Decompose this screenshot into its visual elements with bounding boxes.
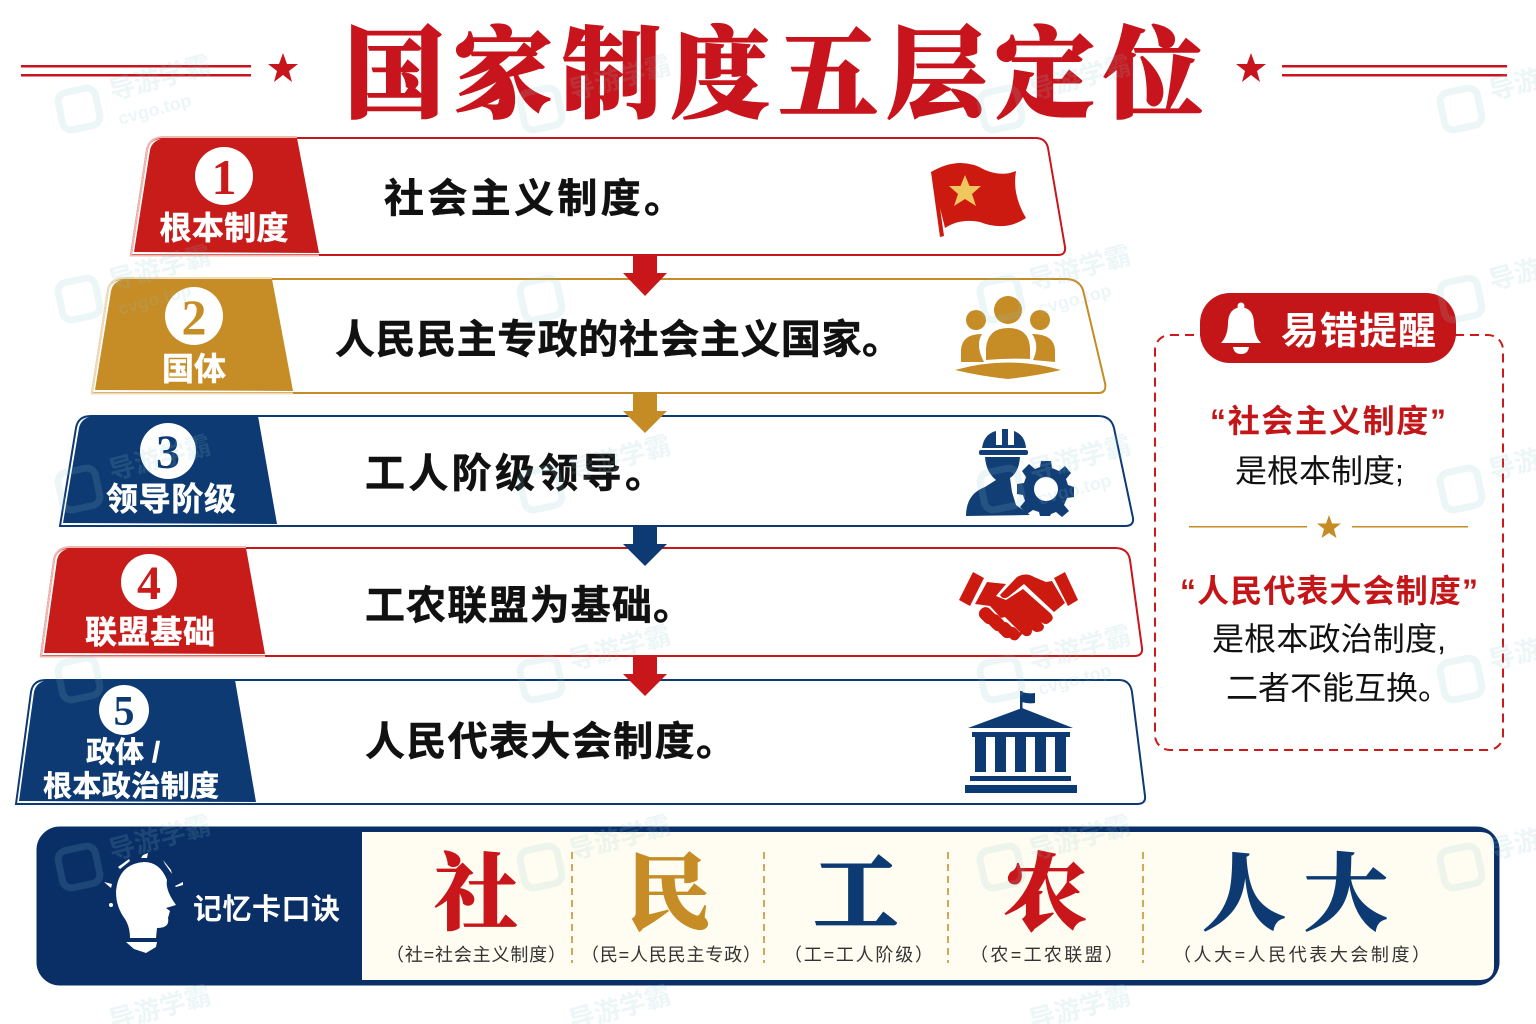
text: cvgo.top [1036, 280, 1113, 319]
title: 国家制度五层定位 [345, 0, 1203, 138]
mnemonic: 民: 民 [627, 827, 711, 948]
level 5 number [99, 685, 149, 735]
level 4 label: 联盟基础 [85, 614, 215, 650]
arrow: level 3 to 4 [623, 526, 667, 566]
level 3 number: 3 [156, 426, 180, 479]
level 2 number: 2 [182, 289, 206, 345]
level 5 number: 5 [114, 689, 134, 735]
mnemonic: 民 [581, 827, 761, 965]
arrow: level 1 to 2 [623, 255, 667, 296]
memory card heading: 记忆卡口诀 [193, 893, 340, 926]
level 1 number: 1 [212, 149, 236, 205]
text: 导游学霸 [1026, 240, 1134, 296]
icon: flag [931, 163, 1026, 237]
reminder text 2: 是根本政治制度, [1212, 621, 1446, 657]
reminder text 2: “人民代表大会制度” [1180, 573, 1478, 609]
panel: level 2 国体 [92, 278, 1105, 394]
text: 导游学霸 [566, 810, 674, 866]
mnemonic: 人大: 大 [1304, 827, 1388, 948]
level 3 label: 领导阶级 [106, 481, 236, 517]
arrow: level 4 to 5 [623, 656, 667, 696]
mnemonic: 社: （社=社会主义制度） [386, 945, 566, 965]
text: 导游学霸 [106, 430, 214, 486]
mnemonic: 人大: （人大=人民代表大会制度） [1173, 945, 1430, 965]
panel: level 1 根本制度 [131, 137, 1065, 256]
level 5 label: 根本政治制度 [43, 770, 219, 803]
mnemonic: 工: （工=工人阶级） [784, 945, 933, 965]
reminder divider with star [1189, 515, 1468, 538]
icon: people [955, 296, 1061, 379]
reminder text 2 [1180, 573, 1478, 706]
level 2 number [165, 287, 223, 345]
level 1 number [195, 147, 253, 205]
icon: bell [1221, 302, 1261, 354]
text: 导游学霸 [1026, 50, 1134, 106]
icon: worker with gear [966, 429, 1074, 517]
panel: level 4 联盟基础 [41, 547, 1142, 656]
level 5 label: 政体 / [86, 736, 160, 769]
mnemonic: 农: （农=工农联盟） [970, 945, 1123, 965]
text: 导游学霸 [1026, 810, 1134, 866]
icon: handshake [959, 572, 1078, 642]
mnemonic: 人大: 人 [1202, 827, 1286, 948]
level 5 label [43, 736, 219, 803]
level 5 statement: 人民代表大会制度。 [365, 720, 736, 764]
title decoration: left lines and star [21, 53, 298, 82]
mnemonic: 社: 社 [434, 827, 518, 948]
mnemonic: 社 [386, 827, 566, 965]
mnemonic: 农: 农 [1000, 827, 1087, 948]
panel: level 3 领导阶级 [60, 416, 1133, 526]
icon: light bulb head [104, 853, 183, 953]
title decoration: right lines and star [1236, 53, 1507, 82]
level 3 statement: 工人阶级领导。 [365, 452, 665, 496]
mnemonic: 工: 工 [814, 827, 898, 948]
icon: government building [965, 691, 1077, 793]
text: cvgo.top [1036, 660, 1113, 699]
level 4 number [121, 554, 177, 610]
text: 导游学霸 [566, 50, 674, 106]
arrow: level 2 to 3 [623, 393, 667, 433]
reminder heading pill [1200, 293, 1456, 363]
text: 导游学霸 [1026, 430, 1134, 486]
reminder heading pill: 易错提醒 [1281, 311, 1436, 353]
text: 导游学霸 [106, 50, 214, 106]
level 4 number: 4 [137, 557, 161, 610]
level 1 label: 根本制度 [160, 210, 288, 246]
text: 导游学霸 [106, 240, 214, 296]
level 1 statement: 社会主义制度。 [384, 177, 684, 221]
level 2 label: 国体 [162, 351, 226, 387]
text: 导游学霸 [106, 810, 214, 866]
reminder text 1: “社会主义制度” [1210, 403, 1446, 439]
mnemonic: 农 [970, 827, 1123, 965]
text: cvgo.top [116, 90, 193, 129]
reminder text 1 [1210, 403, 1446, 489]
text: 导游学霸 [566, 620, 674, 676]
panel: level 5 政体 / 根本政治制度 [16, 680, 1145, 804]
level 4 statement: 工农联盟为基础。 [365, 584, 693, 628]
reminder text 1: 是根本制度; [1235, 453, 1404, 489]
text: cvgo.top [116, 280, 193, 319]
reminder text 2: 二者不能互换。 [1226, 670, 1450, 706]
panel: memory card [38, 827, 1498, 984]
text: cvgo.top [1036, 470, 1113, 509]
mnemonic: 民: （民=人民民主专政） [581, 945, 761, 965]
text: 导游学霸 [566, 430, 674, 486]
text: 导游学霸 [1026, 620, 1134, 676]
mnemonic: 人大 [1173, 827, 1430, 965]
cream mnemonic area [362, 832, 1494, 980]
level 3 number [140, 423, 196, 479]
level 2 statement: 人民民主专政的社会主义国家。 [335, 318, 902, 362]
mnemonic: 工 [784, 827, 933, 965]
dividers [572, 852, 1143, 963]
panel: common-mistake reminder [1155, 293, 1503, 750]
